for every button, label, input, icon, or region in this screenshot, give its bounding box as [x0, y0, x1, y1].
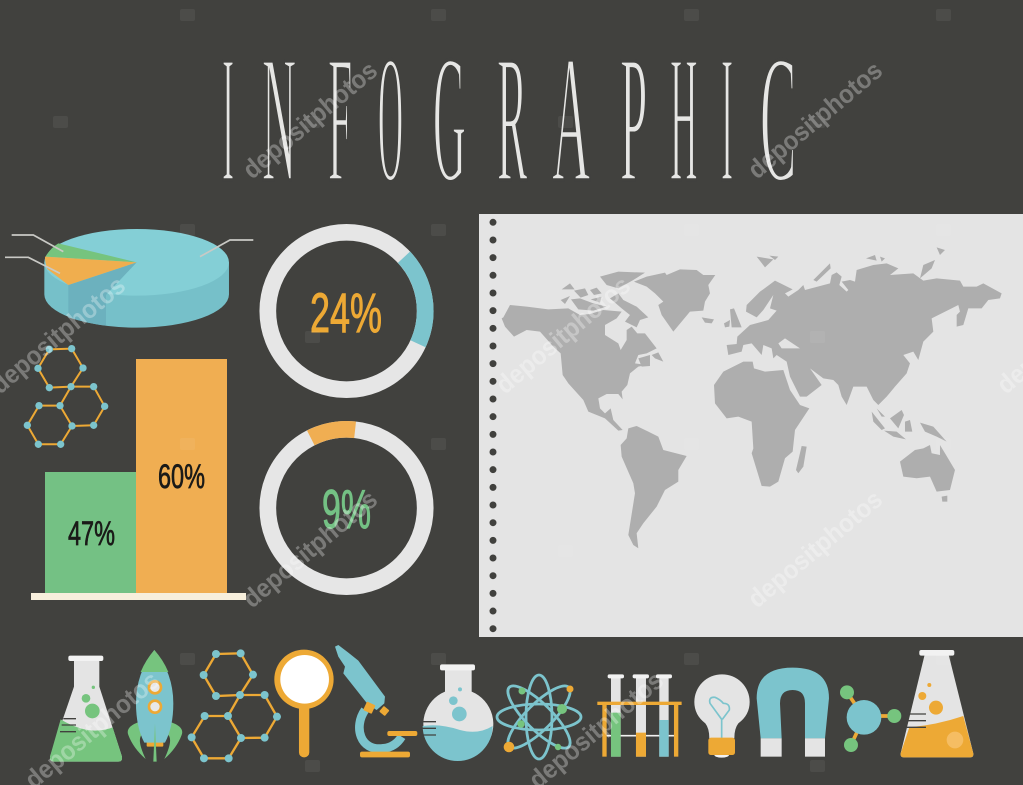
donut 9%: 9% [322, 478, 371, 540]
icon: magnet [757, 668, 829, 757]
icon: atom [497, 675, 581, 759]
world map: americas [502, 269, 715, 548]
icon: light bulb [694, 674, 750, 758]
title: O [378, 19, 403, 220]
icon: molecule [840, 685, 901, 752]
bar chart: 60% [158, 458, 205, 496]
watermark: depositphotos [742, 55, 888, 185]
icon: hexagon molecule [188, 649, 281, 762]
title: I [721, 19, 733, 220]
watermark: depositphotos [237, 55, 383, 185]
donut 24%: 24% [310, 281, 382, 344]
pie chart [5, 229, 253, 328]
donut 24% [268, 232, 425, 390]
world map: eurasia, africa, australia [714, 247, 1002, 502]
title: R [497, 18, 528, 220]
title: N [262, 18, 296, 220]
title [222, 18, 796, 221]
notebook paper [479, 214, 1023, 637]
icon: magnifier [274, 650, 334, 757]
title: I [222, 19, 234, 220]
icon: test tubes [597, 674, 682, 757]
watermark: depositphotos [490, 270, 636, 400]
small hexagon molecule [24, 345, 108, 448]
icon: rocket [128, 650, 182, 762]
bar chart [31, 359, 246, 600]
title: F [328, 18, 352, 220]
title: A [552, 18, 590, 219]
title: C [760, 19, 796, 221]
title: P [620, 18, 647, 220]
icon: microscope [335, 645, 417, 757]
icon: orange flask [901, 650, 973, 757]
title: H [670, 19, 698, 220]
donut 9% [268, 429, 425, 587]
bar chart: 47% [68, 515, 115, 553]
watermark: depositphotos [237, 484, 383, 614]
title: G [433, 18, 466, 220]
icon: round flask [422, 664, 493, 761]
watermark: depositphotos [742, 484, 888, 614]
icon: green flask [50, 656, 122, 762]
